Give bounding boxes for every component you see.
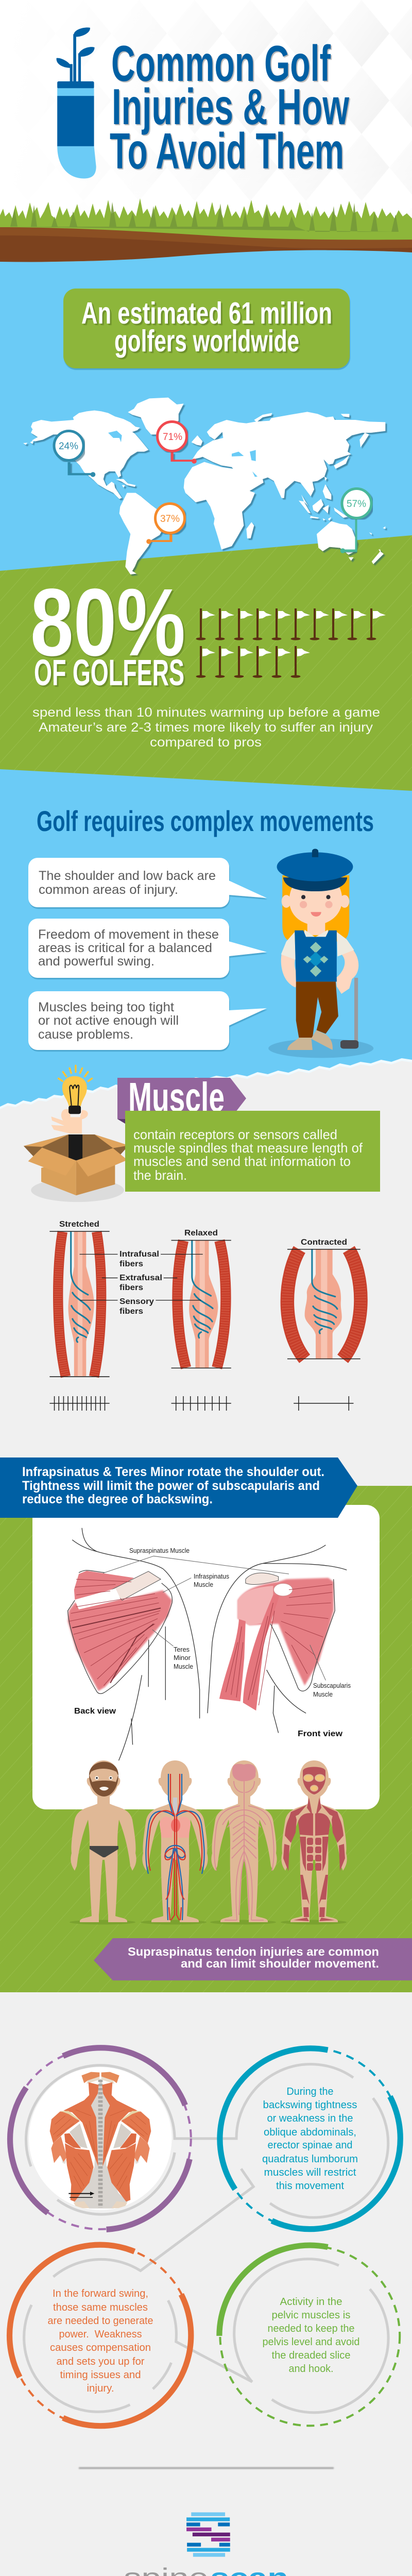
circle: backswing: During the: [286, 2086, 334, 2097]
figure: circulatory system: [141, 1760, 208, 1925]
circle: forward swing: power. Weakness: [59, 2329, 142, 2340]
diagram labels: fibers: Extrafusal: [119, 1274, 162, 1282]
green diagonal panel: [0, 535, 412, 791]
shoulder labels: Infraspinatus: [194, 1573, 229, 1580]
circle: pelvic muscles: and hook.: [288, 2363, 334, 2375]
banner: infraspinatus and teres minor: [0, 1458, 357, 1518]
circle: backswing: [219, 2048, 401, 2229]
title: [110, 35, 350, 179]
icon: golf bag: [57, 27, 96, 179]
world map: [23, 398, 385, 574]
circle: forward swing: those same muscles: [53, 2302, 148, 2313]
speech bubble 1: [28, 858, 267, 907]
speech bubble 3: cause problems.: [38, 1027, 133, 1042]
speech bubble 2: areas is critical for a balanced: [38, 941, 212, 955]
circle: pelvic muscles: Activity in the: [280, 2296, 342, 2308]
logo: spinescan mark: [186, 2512, 230, 2557]
diagram: contracted muscle spindle: Contracted: [301, 1238, 347, 1247]
shoulder labels: [74, 1547, 351, 1738]
diagram labels: fibers: fibers: [119, 1307, 143, 1316]
diagram labels: fibers: Intrafusal: [119, 1250, 159, 1259]
banner: supraspinatus tendon: [94, 1938, 412, 1980]
text panel: muscle spindles: [125, 1111, 380, 1192]
header background: [0, 0, 412, 247]
text panel: muscle spindles: muscles and send that information to: [133, 1154, 351, 1169]
diagram: stretched muscle spindle: [49, 1220, 117, 1411]
circle: backswing: oblique abdominals,: [264, 2127, 356, 2138]
circle: pelvic muscles: pelvic muscles is: [272, 2310, 350, 2321]
text panel: muscle spindles: muscle spindles that measure length of: [133, 1140, 363, 1156]
shoulder labels: Minor: [174, 1654, 191, 1662]
circle: forward swing: causes compensation: [50, 2342, 151, 2353]
banner: infraspinatus and teres minor: Tightness will limit the power of subscapularis and: [22, 1479, 320, 1493]
water background: [0, 247, 412, 1123]
circle: pelvic muscles: [219, 2245, 400, 2426]
illustration: light bulb in box: [24, 1065, 129, 1202]
flags pictogram: [196, 608, 386, 678]
circle: forward swing: and sets you up for: [57, 2356, 145, 2367]
shoulder labels: Muscle: [194, 1581, 213, 1588]
speech bubble 2: and powerful swing.: [38, 954, 154, 969]
diagram: relaxed muscle spindle: [156, 1229, 231, 1411]
banner: supraspinatus tendon: and can limit shoulder movement.: [181, 1957, 379, 1970]
green shoulder panel: [0, 1486, 412, 1992]
shoulder labels: Front view: [298, 1730, 343, 1738]
map marker 57%: 57%: [347, 499, 366, 510]
circle: forward swing: are needed to generate: [47, 2315, 153, 2327]
diagram labels: fibers: [119, 1250, 162, 1316]
speech bubble 2: [28, 919, 267, 978]
circle: forward swing: In the forward swing,: [53, 2288, 148, 2299]
label: muscle: Muscle: [128, 1074, 225, 1120]
figure: nervous system: [210, 1760, 277, 1925]
map marker 37%: [146, 504, 184, 544]
grass: [0, 198, 412, 247]
text: warming up statistic: spend less than 10 minutes warming up before a game: [32, 705, 380, 720]
circle: forward swing: [10, 2245, 192, 2427]
map marker 71%: 71%: [163, 432, 182, 443]
callout: 61 million golfers: golfers worldwide: [114, 324, 299, 358]
banner: infraspinatus and teres minor: reduce the degree of backswing.: [22, 1492, 213, 1506]
speech bubble 3: [28, 991, 267, 1050]
map marker 71%: [158, 421, 197, 464]
divider: [79, 2467, 334, 2469]
shoulder labels: Subscapularis: [313, 1682, 351, 1689]
diagram: contracted muscle spindle: [287, 1238, 361, 1411]
figure: muscular system: [281, 1760, 347, 1925]
banner: infraspinatus and teres minor: Infrapsinatus & Teres Minor rotate the shoulder out.: [22, 1465, 324, 1479]
logo: wordmark: [124, 2563, 288, 2576]
speech bubble 2: Freedom of movement in these: [38, 927, 219, 942]
text: warming up statistic: compared to pros: [150, 735, 262, 750]
speech bubble 1: The shoulder and low back are: [39, 869, 216, 883]
circle: forward swing: injury.: [87, 2383, 114, 2394]
diagram: shoulder back view: [68, 1528, 289, 1760]
connector lines and inner rings: [24, 2064, 388, 2413]
banner: supraspinatus tendon: Supraspinatus tendon injuries are common: [128, 1945, 379, 1958]
figure: man: [70, 1760, 136, 1925]
shoulder labels: Back view: [74, 1707, 116, 1716]
circle: backswing: muscles will restrict: [264, 2167, 356, 2178]
ground: soil band: [0, 227, 412, 268]
ring: back muscles circle: [10, 2048, 191, 2229]
text panel: muscle spindles: contain receptors or sensors called: [133, 1127, 337, 1142]
circle: backswing: backswing tightness: [263, 2099, 357, 2111]
circle: pelvic muscles: needed to keep the: [268, 2323, 354, 2334]
speech bubble 3: Muscles being too tight: [38, 1000, 174, 1014]
diagram: relaxed muscle spindle: Relaxed: [184, 1229, 218, 1238]
diagram labels: fibers: fibers: [119, 1283, 143, 1292]
stat: 80% of golfers: 80%: [30, 569, 185, 676]
map marker 57%: [340, 488, 371, 553]
speech bubble 3: or not active enough will: [38, 1013, 179, 1028]
circle: backswing: this movement: [276, 2180, 344, 2192]
text: warming up statistic: [32, 705, 380, 750]
shoulder labels: Muscle: [174, 1663, 193, 1670]
map marker 37%: 37%: [160, 514, 180, 524]
shoulder labels: Supraspinatus Muscle: [129, 1547, 190, 1554]
circle: backswing: erector spinae and: [268, 2140, 352, 2151]
map marker 24%: [54, 431, 95, 477]
illustration: golfer: [268, 849, 373, 1058]
circle: pelvic muscles: the dreaded slice: [272, 2350, 350, 2361]
circle: backswing: quadratus lumborum: [262, 2154, 358, 2165]
circle: forward swing: timing issues and: [60, 2369, 141, 2381]
diagram labels: fibers: Sensory: [119, 1297, 154, 1306]
circle: pelvic muscles: pelvis level and avoid: [263, 2336, 359, 2348]
diagram: shoulder front view: [208, 1545, 347, 1733]
grey section background: [0, 1058, 412, 2576]
white card: [32, 1505, 380, 1809]
callout: 61 million golfers: [63, 289, 350, 368]
illustration: back muscles: [50, 2072, 151, 2209]
text panel: muscle spindles: the brain.: [133, 1167, 187, 1183]
diagram labels: fibers: fibers: [119, 1260, 143, 1268]
shoulder labels: Teres: [174, 1646, 190, 1653]
circle: backswing: or weakness in the: [267, 2113, 353, 2124]
stat: 80% of golfers: OF GOLFERS: [34, 653, 184, 693]
shoulder labels: Muscle: [313, 1691, 333, 1698]
map marker 24%: 24%: [59, 441, 78, 452]
callout: 61 million golfers: An estimated 61 million: [81, 296, 332, 330]
speech bubble 1: common areas of injury.: [39, 883, 178, 897]
diagram: stretched muscle spindle: Stretched: [59, 1220, 99, 1229]
text: warming up statistic: Amateur’s are 2-3 times more likely to suffer an injury: [39, 720, 373, 735]
